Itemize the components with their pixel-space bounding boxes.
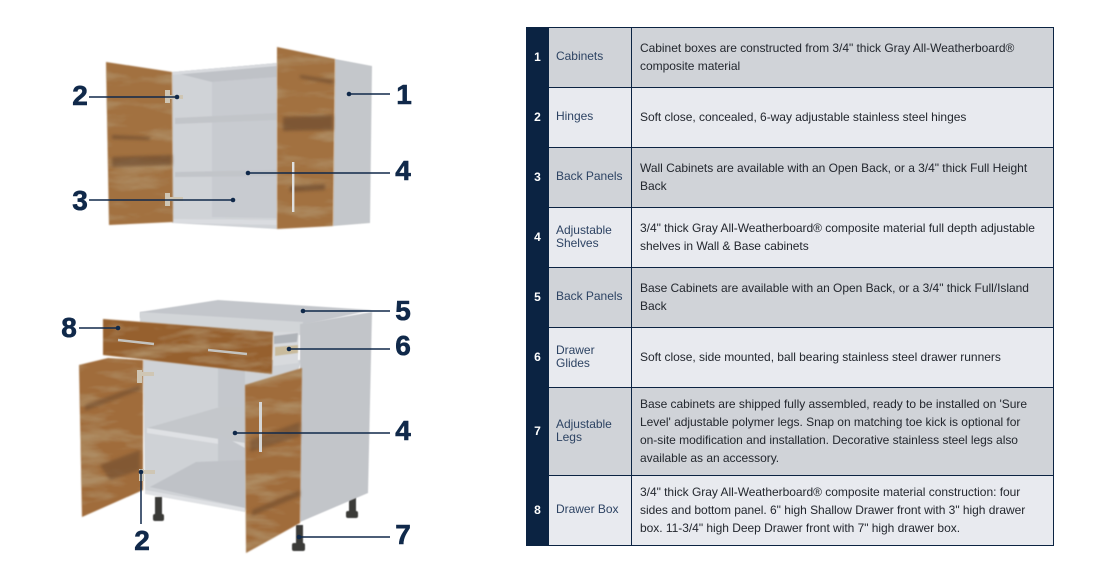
specification table [526,27,1054,546]
row 4 [534,208,1053,267]
row 8: Drawer Box [556,502,618,516]
row 1: Cabinet boxes are constructed from 3/4" thick Gray All-Weatherboard® [640,40,1014,54]
row 5 [534,268,1053,327]
row 8 [534,476,1053,545]
row 1: composite material [640,58,740,72]
row 7: available as an accessory. [640,450,779,464]
row 7: Base cabinets are shipped fully assembled, ready to be installed on 'Sure [640,396,1027,410]
row 4: 3/4" thick Gray All-Weatherboard® composite material full depth adjustable [640,220,1035,234]
row 1: Cabinets [556,49,603,63]
drawer handles [118,340,247,354]
wall hinge lower [165,193,183,206]
wall hinge upper [165,90,183,103]
base cabinet side panel [300,312,372,522]
row 4: Shelves [556,236,599,250]
row 5: Base Cabinets are available with an Open Back, or a 3/4" thick Full/Island [640,280,1029,294]
callout numbers: 1 [396,79,412,110]
callout numbers: 4 [395,155,411,186]
callout numbers: 6 [395,330,411,361]
base left door [79,358,143,517]
row 3: Back Panels [556,169,622,183]
base hinges [137,370,155,481]
row 3 [534,148,1053,207]
row 1 [534,28,1053,87]
callout numbers: 8 [61,312,77,343]
callout numbers: 7 [395,519,411,550]
callout numbers: 2 [72,80,88,111]
wall cabinet right door [277,47,335,229]
callout numbers: 5 [395,295,411,326]
row 7: Adjustable [556,416,612,430]
row 5: Back [640,298,667,312]
row 1: 1 [534,50,541,64]
row 3: Back [640,178,667,192]
wall cabinet interior [172,63,277,229]
row 2: Soft close, concealed, 6-way adjustable stainless steel hinges [640,110,966,124]
callout numbers [61,79,412,556]
base cabinet legs [153,494,358,551]
row 3: 3 [534,170,541,184]
base cabinet [79,300,372,553]
drawer front [103,319,273,374]
row 2: Hinges [556,109,593,123]
row 6: 6 [534,350,541,364]
callout numbers: 2 [134,525,150,556]
wood streaks base doors [85,385,300,516]
row 6: Glides [556,356,590,370]
row 4: shelves in Wall & Base cabinets [640,238,809,252]
base cabinet interior [143,360,302,512]
row 2: 2 [534,110,541,124]
row 8: sides and bottom panel. 6" high Shallow Drawer front with 3" high drawer [640,502,1025,516]
callout lines [79,92,390,539]
row 6: Soft close, side mounted, ball bearing stainless steel drawer runners [640,350,1001,364]
row 7: on-site modification and installation. Decorative stainless steel legs also [640,432,1018,446]
row 8: 3/4" thick Gray All-Weatherboard® composite material construction: four [640,484,1020,498]
drawer box [273,332,299,366]
row 8: 8 [534,503,541,517]
wall cabinet side panel [333,59,372,226]
row 4: Adjustable [556,222,612,236]
row 6 [534,328,1053,387]
wall door handle [292,162,294,212]
row 4: 4 [534,230,541,244]
base door handle [259,402,262,452]
cabinet diagrams [61,46,412,556]
row 5: 5 [534,290,541,304]
base right door [245,368,302,553]
row 8: box. 11-3/4" high Deep Drawer front with 7" high drawer box. [640,520,960,534]
row 7: 7 [534,424,541,438]
base cabinet top [140,300,372,325]
callout numbers: 3 [72,185,88,216]
row 7: Legs [556,430,582,444]
wall cabinet [106,47,372,229]
row 7: Level' adjustable polymer legs. Snap on matching toe kick is optional for [640,414,1020,428]
callout numbers: 4 [395,415,411,446]
row 5: Back Panels [556,289,622,303]
row 3: Wall Cabinets are available with an Open Back, or a 3/4" thick Full Height [640,160,1027,174]
wood streaks wall doors [112,75,333,192]
row 2 [534,88,1053,147]
wall cabinet left door [106,62,173,225]
row 6: Drawer [556,342,595,356]
row 7 [534,388,1053,475]
